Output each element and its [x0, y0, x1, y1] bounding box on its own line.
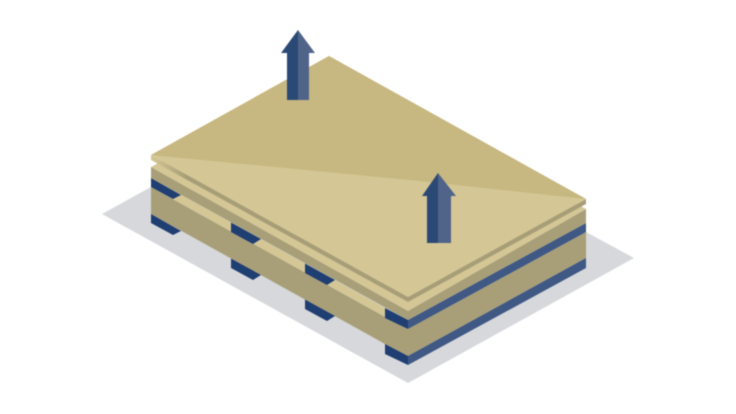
deck side: [151, 167, 586, 320]
deck top: [151, 70, 586, 311]
lower tan board: [151, 187, 586, 356]
ground shadow: [102, 187, 634, 383]
upper row blocks: [151, 178, 408, 329]
sheet surface dark: [151, 56, 586, 199]
top sheet: [151, 56, 586, 302]
lower right runner: [408, 258, 586, 365]
pallet: [151, 70, 586, 365]
sheet edge: [151, 155, 586, 302]
light slat band: [151, 178, 385, 317]
arrow: back up arrow: [281, 30, 315, 100]
sheet surface light: [151, 56, 586, 297]
upper right runner: [408, 223, 586, 329]
lower row blocks: [151, 214, 408, 365]
arrow: front up arrow: [422, 173, 456, 243]
